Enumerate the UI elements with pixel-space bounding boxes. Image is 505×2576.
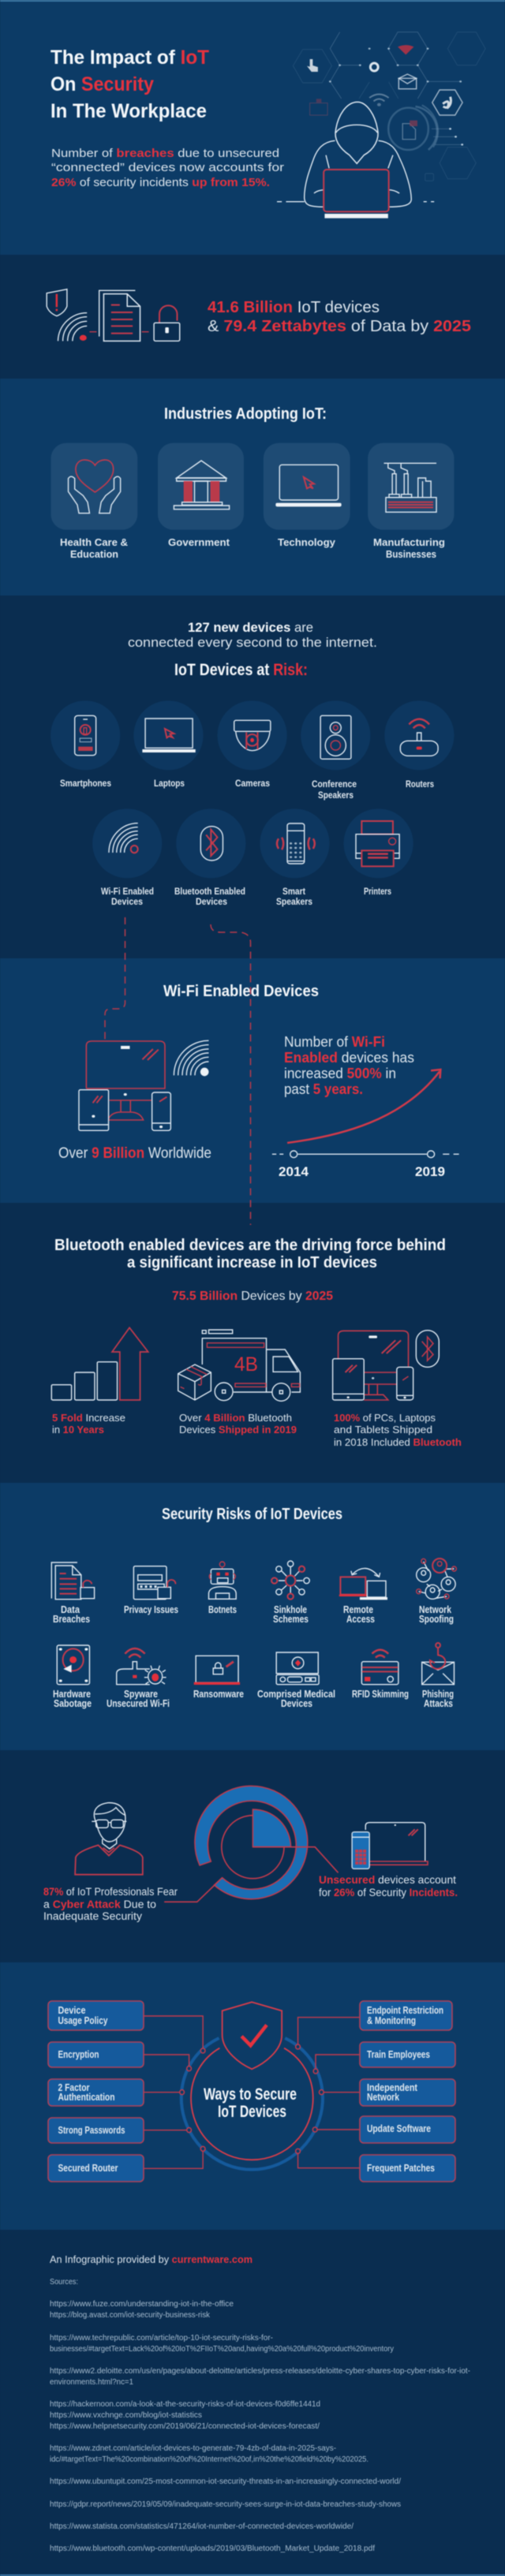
icon: compromised medical devices [276, 1652, 319, 1685]
icon: professional with glasses [75, 1803, 143, 1875]
device: printers [344, 808, 413, 897]
labels: security risks: Network [419, 1604, 451, 1615]
icons: security risks [51, 1559, 456, 1685]
labels: security risks: Sabotage [54, 1698, 92, 1709]
device: wi-fi enabled: Devices [111, 896, 143, 907]
growth text: Enabled devices has [284, 1050, 414, 1066]
title: On Security [50, 73, 154, 95]
caption: over 9 billion: Over 9 Billion Worldwide [58, 1145, 211, 1162]
box: device usage policy: Device [58, 2005, 86, 2016]
sources list: https://www.statista.com/statistics/471264/iot-number-of-connected-devices-worldwide/ [50, 2522, 354, 2531]
panel: industries adopting IoT [0, 379, 505, 595]
captions: Devices Shipped in 2019 [179, 1424, 297, 1435]
box: device usage policy [48, 2001, 144, 2030]
credit line: An Infographic provided by currentware.com [50, 2253, 252, 2265]
device: conference speakers: Conference [312, 778, 357, 790]
sources list: environments.html?nc=1 [50, 2378, 133, 2387]
device: wi-fi enabled [92, 808, 162, 907]
text: ways to secure: IoT Devices [218, 2103, 286, 2121]
panel: IoT devices at risk [0, 595, 505, 958]
box: encryption: Encryption [58, 2049, 99, 2060]
box: endpoint restriction and monitoring: & Monitoring [367, 2015, 416, 2026]
arrows: dashed connectors from icons to detail panels [105, 917, 251, 1225]
growth text: past 5 years. [284, 1081, 363, 1097]
panel: security risks [0, 1483, 505, 1750]
stat: 75.5 billion: 75.5 Billion Devices by 2025 [172, 1290, 333, 1303]
device: bluetooth enabled: Devices [196, 896, 227, 907]
icon: ransomware [194, 1656, 240, 1685]
icon: remote access [339, 1568, 387, 1600]
box: train employees [360, 2042, 455, 2067]
icon: devices and wifi [79, 1040, 208, 1130]
card: technology [264, 443, 350, 548]
card: government [158, 443, 244, 548]
panel: intro [0, 0, 505, 255]
panel: cyber attack statistics [0, 1750, 505, 1962]
intro paragraph [51, 147, 284, 189]
captions [52, 1412, 462, 1448]
text: 87 percent fear cyber attack: Inadequate Security [43, 1910, 142, 1922]
text: unsecured devices [319, 1873, 458, 1898]
text: unsecured devices: Unsecured devices account [319, 1873, 456, 1886]
heading: Wi-Fi Enabled Devices [163, 983, 319, 1000]
card: manufacturing: Manufacturing [373, 536, 445, 548]
labels: security risks: Privacy Issues [124, 1604, 178, 1615]
card: health care: Education [70, 548, 118, 560]
device: conference speakers [301, 700, 370, 801]
sources list: Sources: [50, 2278, 78, 2287]
box: independent network: Network [367, 2092, 399, 2103]
sources list: https://hackernoon.com/a-look-at-the-security-risks-of-iot-devices-f0d6ffe1441d [50, 2400, 320, 2409]
card: technology: Technology [278, 536, 336, 548]
box: encryption [48, 2042, 144, 2067]
sources list: https://www2.deloitte.com/us/en/pages/about-deloitte/articles/press-releases/deloitte-cyber-shares-top-cyber-risks-for-iot- [50, 2367, 470, 2376]
title: The Impact of IoT [50, 47, 209, 69]
icon: hardware sabotage [57, 1645, 89, 1685]
captions: and Tablets Shipped [334, 1424, 432, 1435]
captions: 5 Fold Increase [52, 1412, 125, 1424]
device: routers [384, 700, 454, 790]
sources list [50, 2278, 470, 2553]
text: 87 percent fear cyber attack: a Cyber Attack Due to [43, 1898, 156, 1910]
box: update software [360, 2116, 455, 2143]
captions: 100% of PCs, Laptops [334, 1412, 436, 1424]
icon: delivery truck [178, 1330, 300, 1401]
labels: security risks: Unsecured Wi-Fi [107, 1698, 170, 1709]
heading: IoT Devices at Risk: [174, 661, 308, 679]
box: secured router: Secured Router [58, 2163, 118, 2174]
device: cameras [218, 700, 287, 789]
labels: security risks: Comprised Medical [257, 1689, 335, 1700]
box: frequent patches [360, 2155, 455, 2182]
device: smart speakers: Speakers [276, 896, 312, 907]
heading: Security Risks of IoT Devices [162, 1506, 342, 1523]
labels: security risks: Hardware [53, 1689, 91, 1700]
labels: security risks: RFID Skimming [352, 1689, 409, 1700]
box: strong passwords [48, 2118, 144, 2143]
icon: laptop and phone [352, 1823, 428, 1869]
heading [54, 1237, 446, 1271]
icon: sinkhole schemes [271, 1561, 309, 1600]
icon: bluetooth devices [333, 1331, 439, 1400]
device: smart speakers: Smart [282, 886, 305, 897]
new devices statement: connected every second to the internet. [128, 636, 377, 650]
intro paragraph: Number of breaches due to unsecured [51, 147, 279, 160]
panel: wi-fi enabled devices [0, 958, 505, 1203]
heading: Industries Adopting IoT: [164, 405, 327, 423]
labels: security risks: Access [346, 1614, 375, 1625]
captions: in 10 Years [52, 1424, 104, 1435]
labels: security risks: Ransomware [193, 1689, 244, 1700]
sources list: https://www.zdnet.com/article/iot-devices-to-generate-79-4zb-of-data-in-2025-says- [50, 2444, 336, 2453]
icon: phishing attacks [422, 1643, 454, 1685]
icon: hooded hacker with laptop [277, 102, 434, 218]
device: smart speakers [260, 808, 330, 907]
box: two factor authentication: Authentication [58, 2092, 115, 2103]
labels: security risks: Phishing [422, 1689, 454, 1700]
labels: security risks: Botnets [208, 1604, 237, 1615]
text: 4B: 4B [234, 1353, 258, 1376]
box: independent network: Independent [367, 2082, 418, 2093]
chart: growth arrow and timeline: 2014 [279, 1164, 309, 1179]
growth text [284, 1034, 414, 1097]
box: strong passwords: Strong Passwords [58, 2125, 125, 2136]
box: independent network [360, 2079, 455, 2106]
labels: security risks: Breaches [53, 1614, 90, 1625]
new devices statement [128, 621, 377, 650]
device: smartphones [50, 700, 120, 789]
icon: network spoofing [417, 1559, 456, 1599]
labels: security risks: Spoofing [419, 1614, 454, 1625]
heading: a significant increase in IoT devices [127, 1254, 377, 1271]
heading: Bluetooth enabled devices are the driving force behind [54, 1237, 446, 1254]
panel: bluetooth enabled devices [0, 1203, 505, 1483]
intro paragraph: “connected” devices now accounts for [51, 161, 284, 174]
text: 87 percent fear cyber attack: 87% of IoT Professionals Fear [43, 1886, 178, 1898]
icon: data breaches [51, 1562, 95, 1600]
box: frequent patches: Frequent Patches [367, 2163, 435, 2174]
title [50, 47, 209, 122]
labels: security risks [53, 1604, 454, 1709]
new devices statement: 127 new devices are [188, 621, 313, 635]
labels: security risks: Schemes [273, 1614, 309, 1625]
text: 87 percent fear cyber attack [43, 1886, 178, 1922]
text: ways to secure [204, 2085, 297, 2121]
labels: security risks: Spyware [124, 1689, 158, 1700]
card: manufacturing [368, 443, 454, 560]
sources list: https://gdpr.report/news/2019/05/09/inadequate-security-sees-surge-in-iot-data-breaches-study-shows [50, 2500, 401, 2509]
labels: security risks: Devices [281, 1698, 312, 1709]
title: In The Workplace [50, 100, 207, 122]
icon: botnets [208, 1562, 236, 1599]
device: bluetooth enabled [174, 808, 245, 907]
sources list: https://www.techrepublic.com/article/top-10-iot-security-risks-for- [50, 2334, 273, 2343]
forecast text: & 79.4 Zettabytes of Data by 2025 [208, 318, 471, 335]
card: manufacturing: Businesses [386, 548, 436, 560]
intro paragraph: 26% of security incidents up from 15%. [51, 176, 270, 189]
icon: privacy issues [133, 1566, 175, 1600]
icon: spyware [117, 1648, 166, 1685]
icon: network of hexagons [293, 32, 485, 181]
panel: ways to secure IoT devices [0, 1962, 505, 2230]
sources list: https://www.fuze.com/understanding-iot-in-the-office [50, 2300, 234, 2309]
sources list: https://www.ubuntupit.com/25-most-common-iot-security-threats-in-an-increasingly-connected-world/ [50, 2477, 401, 2486]
device: smartphones: Smartphones [60, 778, 111, 789]
device: printers: Printers [364, 886, 391, 897]
device: laptops [133, 700, 204, 789]
diagram: central shield and rings [144, 2002, 360, 2170]
chart: growth arrow and timeline [272, 1070, 459, 1179]
device: conference speakers: Speakers [318, 790, 354, 801]
box: update software: Update Software [367, 2123, 431, 2134]
box: device usage policy: Usage Policy [58, 2015, 108, 2026]
box: two factor authentication: 2 Factor [58, 2082, 90, 2093]
sources list: https://www.helpnetsecurity.com/2019/06/21/connected-iot-devices-forecast/ [50, 2422, 320, 2431]
captions: Over 4 Billion Bluetooth [179, 1412, 292, 1424]
icon: growth bars and arrow [51, 1327, 148, 1400]
icon: rfid skimming [361, 1650, 398, 1685]
card: health care [50, 443, 137, 560]
box: endpoint restriction and monitoring [360, 2001, 452, 2030]
chart: growth arrow and timeline: 2019 [415, 1164, 445, 1179]
box: endpoint restriction and monitoring: Endpoint Restriction [367, 2005, 443, 2016]
panel: IoT devices and data forecast [0, 255, 505, 379]
growth text: increased 500% in [284, 1066, 396, 1081]
box: secured router [48, 2155, 144, 2182]
sources list: https://www.bluetooth.com/wp-content/uploads/2019/03/Bluetooth_Market_Update_2018.pdf [50, 2544, 375, 2553]
device: cameras: Cameras [235, 778, 270, 789]
labels: security risks: Sinkhole [274, 1604, 307, 1615]
box: train employees: Train Employees [367, 2049, 430, 2060]
forecast text: 41.6 Billion IoT devices [208, 299, 380, 316]
text: unsecured devices: for 26% of Security Incidents. [319, 1886, 458, 1898]
card: health care: Health Care & [60, 536, 128, 548]
captions: in 2018 Included Bluetooth [334, 1436, 462, 1448]
device: bluetooth enabled: Bluetooth Enabled [174, 886, 245, 897]
labels: security risks: Remote [343, 1604, 373, 1615]
text: ways to secure: Ways to Secure [204, 2085, 297, 2104]
forecast text [208, 299, 471, 335]
growth text: Number of Wi-Fi [284, 1034, 385, 1050]
icon: shield wifi document lock [47, 289, 180, 341]
sources list: https://www.vxchnge.com/blog/iot-statistics [50, 2411, 202, 2420]
sources list: idc/#targetText=The%20combination%20of%20Internet%20of,in%20the%20field%20by%202025. [50, 2455, 368, 2464]
box: two factor authentication [48, 2079, 144, 2106]
device: routers: Routers [406, 778, 434, 790]
panel: credits and sources [0, 2230, 505, 2576]
device: wi-fi enabled: Wi-Fi Enabled [101, 886, 154, 897]
sources list: businesses/#targetText=Lack%20of%20IoT%2FIIoT%20and,having%20a%20full%20product%20inventory [50, 2345, 394, 2354]
sources list: https://blog.avast.com/iot-security-business-risk [50, 2311, 211, 2320]
device: laptops: Laptops [154, 778, 185, 789]
chart: ring and pie [164, 1786, 339, 1902]
labels: security risks: Data [61, 1604, 80, 1615]
labels: security risks: Attacks [424, 1698, 453, 1709]
card: government: Government [168, 536, 230, 548]
